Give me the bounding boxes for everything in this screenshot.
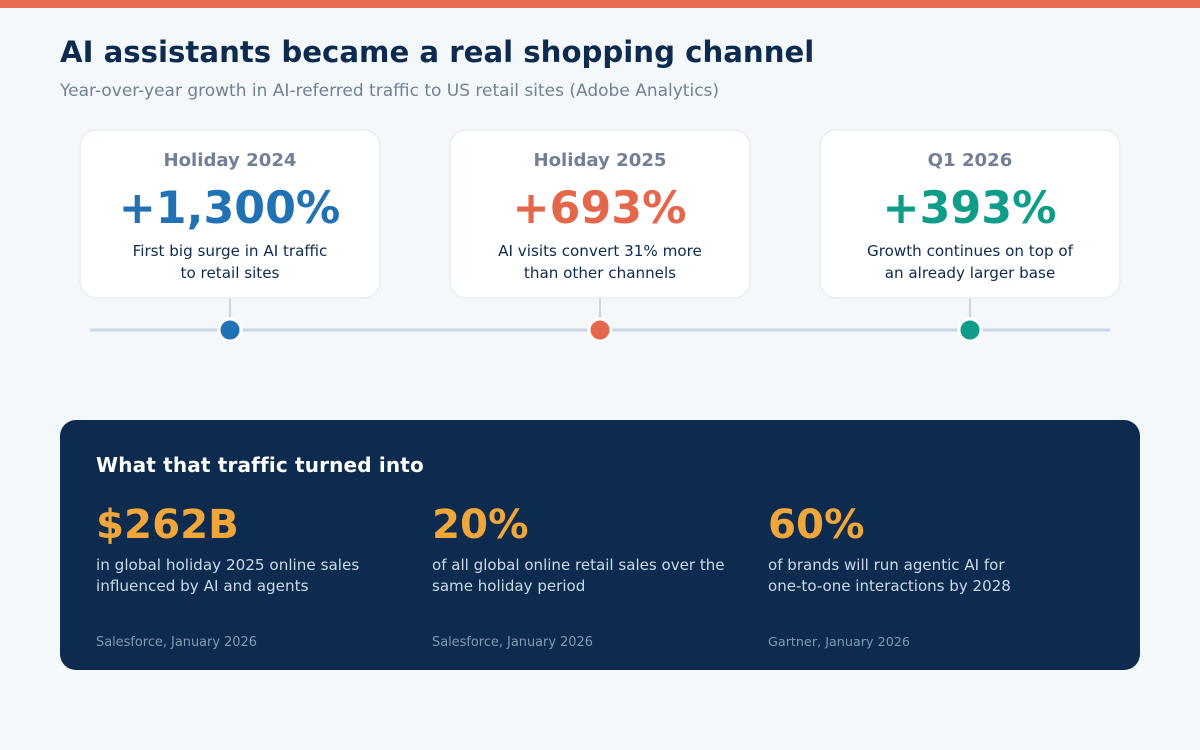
description 2026: Growth continues on top of (867, 242, 1074, 260)
description 2026: an already larger base (885, 264, 1055, 282)
stat: 20%: of all global online retail sales over the (432, 556, 725, 574)
description 2025: than other channels (524, 264, 676, 282)
panel: Holiday 2024 (80, 130, 380, 341)
stat: 20%: same holiday period (432, 577, 585, 595)
stat: 60%: Gartner, January 2026 (768, 635, 910, 650)
panel background (60, 420, 1140, 670)
connector 2024 (229, 298, 231, 320)
panel heading: What that traffic turned into (96, 453, 424, 477)
marker 2024 (219, 319, 241, 341)
subtitle: Year-over-year growth in AI-referred traffic to US retail sites (Adobe Analytics) (59, 81, 719, 101)
stat: 20% (432, 501, 725, 650)
description 2024: First big surge in AI traffic (133, 242, 327, 260)
panel: Holiday 2025 (450, 130, 750, 341)
panel: outcomes (60, 420, 1140, 670)
card 2024 (80, 130, 380, 298)
card 2025 (450, 130, 750, 298)
stat: $262B: in global holiday 2025 online sales (96, 556, 359, 574)
stat: $262B: Salesforce, January 2026 (96, 635, 257, 650)
stat: 60%: 60% (768, 501, 864, 548)
marker 2025 (589, 319, 611, 341)
stat: 60% (768, 501, 1011, 650)
marker 2026 (959, 319, 981, 341)
card 2026 (820, 130, 1120, 298)
period label 2024: Holiday 2024 (163, 150, 297, 171)
stat: 20%: 20% (432, 501, 528, 548)
stat: 20%: Salesforce, January 2026 (432, 635, 593, 650)
stat: $262B (96, 501, 359, 650)
connector 2026 (969, 298, 971, 320)
connector 2025 (599, 298, 601, 320)
stat: $262B: $262B (96, 501, 239, 548)
stat: $262B: influenced by AI and agents (96, 577, 309, 595)
timeline line (90, 328, 1110, 332)
panel: Q1 2026 (820, 130, 1120, 341)
description 2025: AI visits convert 31% more (498, 242, 702, 260)
stat 2024: +1,300% (119, 183, 340, 234)
top accent bar (0, 0, 1200, 8)
title: AI assistants became a real shopping channel (60, 35, 814, 69)
description 2024: to retail sites (181, 264, 280, 282)
stat: 60%: of brands will run agentic AI for (768, 556, 1005, 574)
stat 2025: +693% (513, 183, 686, 234)
period label 2025: Holiday 2025 (533, 150, 667, 171)
period label 2026: Q1 2026 (928, 150, 1012, 171)
stat 2026: +393% (883, 183, 1056, 234)
stat: 60%: one-to-one interactions by 2028 (768, 577, 1011, 595)
